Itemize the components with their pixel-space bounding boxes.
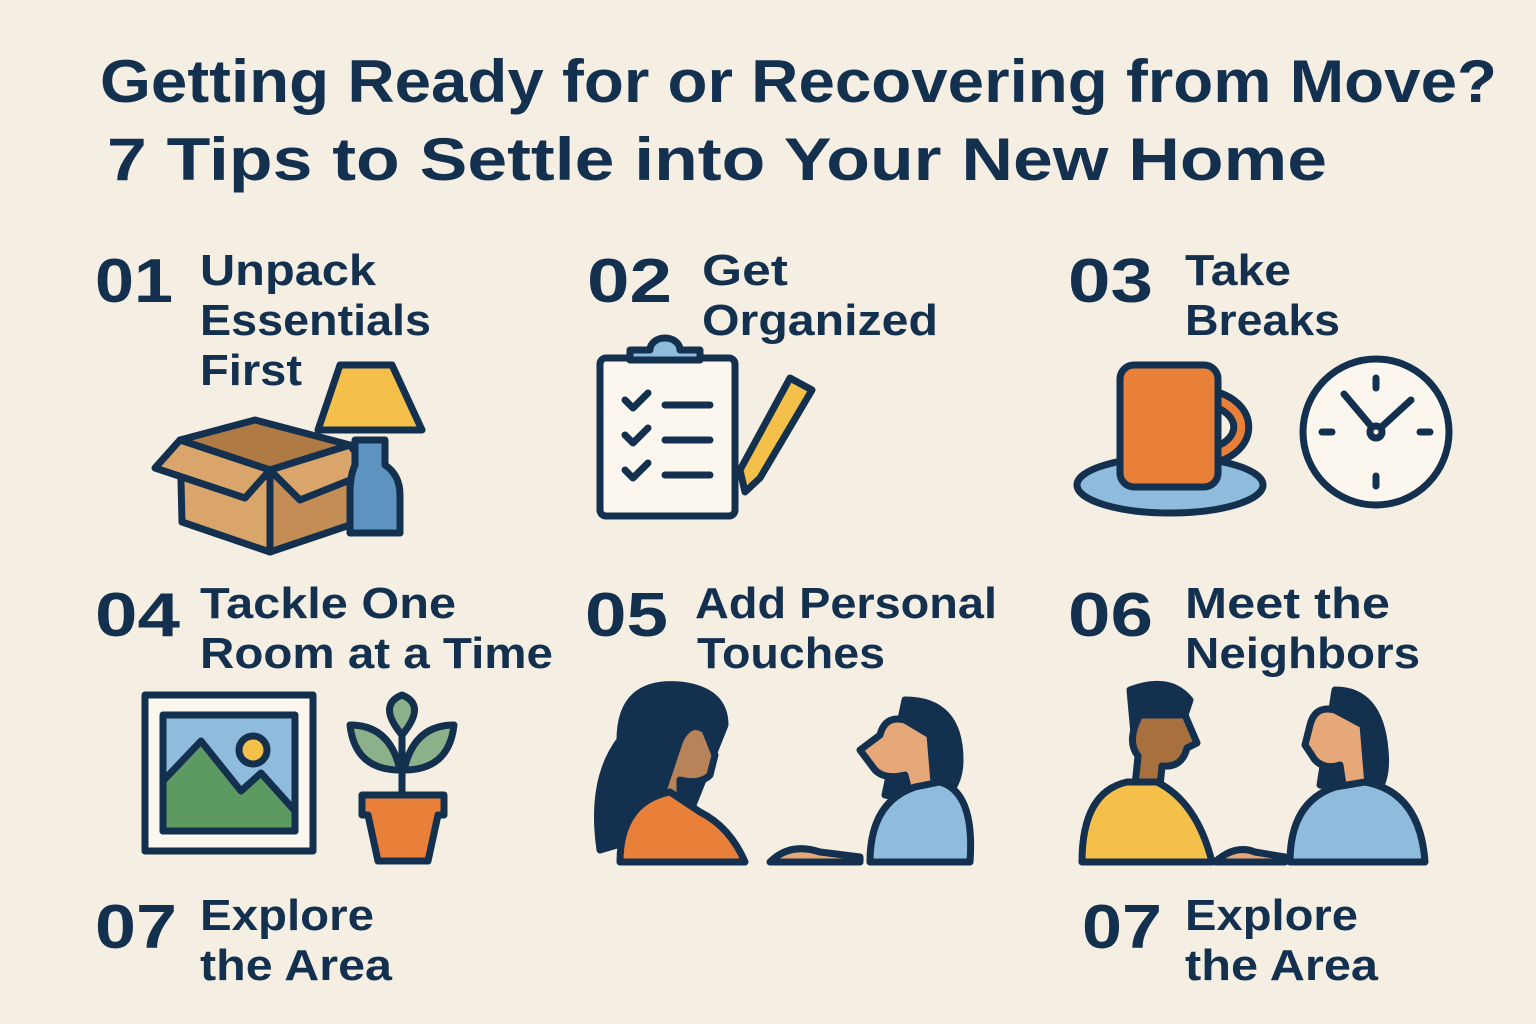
- tip 06 heading: Neighbors: [1185, 629, 1420, 678]
- tip 03 heading: 03: [1068, 247, 1153, 316]
- tip 01 heading: Unpack: [200, 246, 377, 295]
- tip 06 heading: [1068, 579, 1420, 678]
- tip 07 heading right: the Area: [1185, 941, 1379, 990]
- icon: open box and lamp: [155, 365, 422, 552]
- tip 02 heading: 02: [587, 247, 672, 316]
- tip 02 heading: Organized: [702, 296, 938, 345]
- tip 02 heading: Get: [702, 246, 788, 295]
- title: Getting Ready for or Recovering from Move?: [100, 48, 1497, 115]
- icon: two people talking: [598, 685, 971, 862]
- tip 07 heading right: Explore: [1185, 891, 1358, 940]
- icon: neighbors shaking hands: [1082, 684, 1425, 862]
- tip 04 heading: [95, 579, 553, 678]
- tip 05 heading: [585, 579, 997, 678]
- icon: picture frame: [145, 695, 313, 851]
- tip 07 heading left: 07: [95, 893, 177, 962]
- tip 05 heading: 05: [585, 581, 668, 650]
- tip 03 heading: Breaks: [1185, 296, 1340, 345]
- tip 04 heading: 04: [95, 581, 181, 650]
- tip 07 heading right: 07: [1082, 893, 1162, 962]
- tip 03 heading: Take: [1185, 246, 1291, 295]
- tip 01 heading: [95, 246, 431, 395]
- tip 05 heading: Touches: [697, 629, 885, 678]
- icon: clipboard and pencil: [600, 338, 812, 516]
- tip 05 heading: Add Personal: [695, 579, 997, 628]
- tip 07 heading left: Explore: [200, 891, 374, 940]
- tip 01 heading: First: [200, 346, 302, 395]
- icon: clock: [1303, 359, 1449, 505]
- tip 01 heading: 01: [95, 247, 173, 316]
- tip 02 heading: [587, 246, 938, 345]
- tip 06 heading: Meet the: [1185, 579, 1390, 628]
- tip 07 heading left: the Area: [200, 941, 393, 990]
- tip 01 heading: Essentials: [200, 296, 431, 345]
- tip 04 heading: Tackle One: [200, 579, 456, 628]
- icon: potted plant: [350, 695, 454, 861]
- tip 07 heading right: [1082, 891, 1379, 990]
- tip 07 heading left: [95, 891, 393, 990]
- icon: mug on saucer: [1077, 365, 1263, 513]
- title: [100, 48, 1497, 193]
- tip 04 heading: Room at a Time: [200, 629, 553, 678]
- tip 06 heading: 06: [1068, 581, 1153, 650]
- tip 03 heading: [1068, 246, 1340, 345]
- title: 7 Tips to Settle into Your New Home: [107, 126, 1327, 193]
